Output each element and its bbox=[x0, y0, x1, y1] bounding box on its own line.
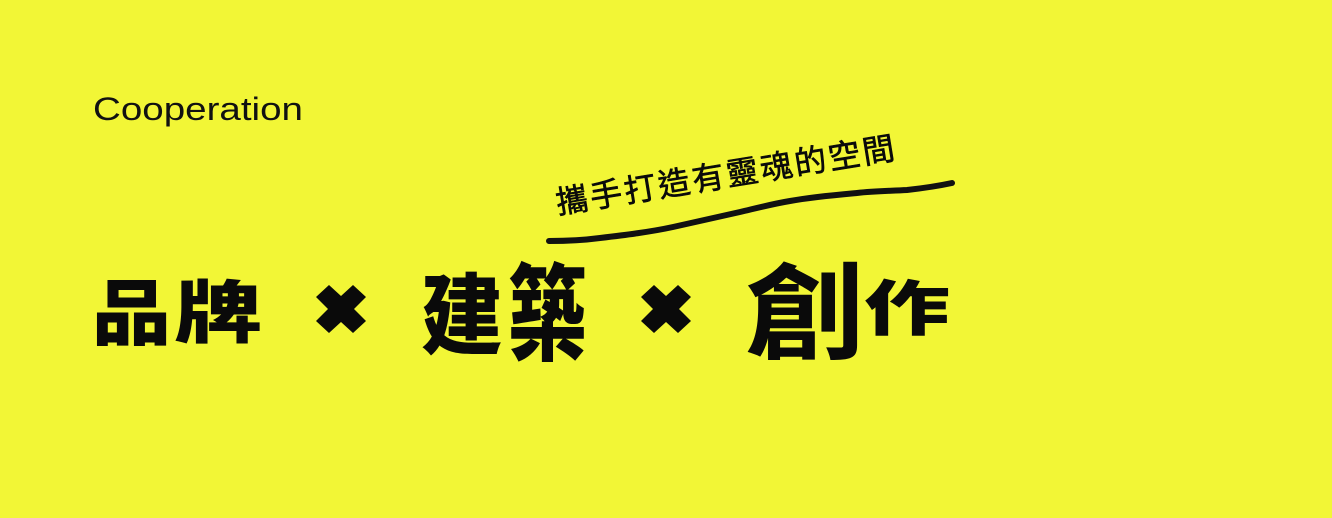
title word: brand: 品 bbox=[92, 275, 171, 355]
icon: multiply sign bbox=[316, 285, 366, 333]
icon: multiply sign bbox=[641, 285, 691, 333]
title word: architecture: 築 bbox=[508, 257, 587, 375]
title word: architecture: 建 bbox=[421, 268, 503, 367]
brush underline bbox=[549, 183, 952, 241]
heading: Cooperation: Cooperation bbox=[93, 91, 303, 127]
title word: architecture bbox=[421, 257, 587, 375]
title word: brand bbox=[92, 275, 262, 355]
tagline: 攜手打造有靈魂的空間 bbox=[553, 130, 900, 221]
title word: brand: 牌 bbox=[174, 276, 262, 352]
title word: creation: 創 bbox=[745, 256, 865, 373]
title word: creation: 作 bbox=[864, 276, 950, 343]
title word: creation bbox=[745, 256, 950, 373]
